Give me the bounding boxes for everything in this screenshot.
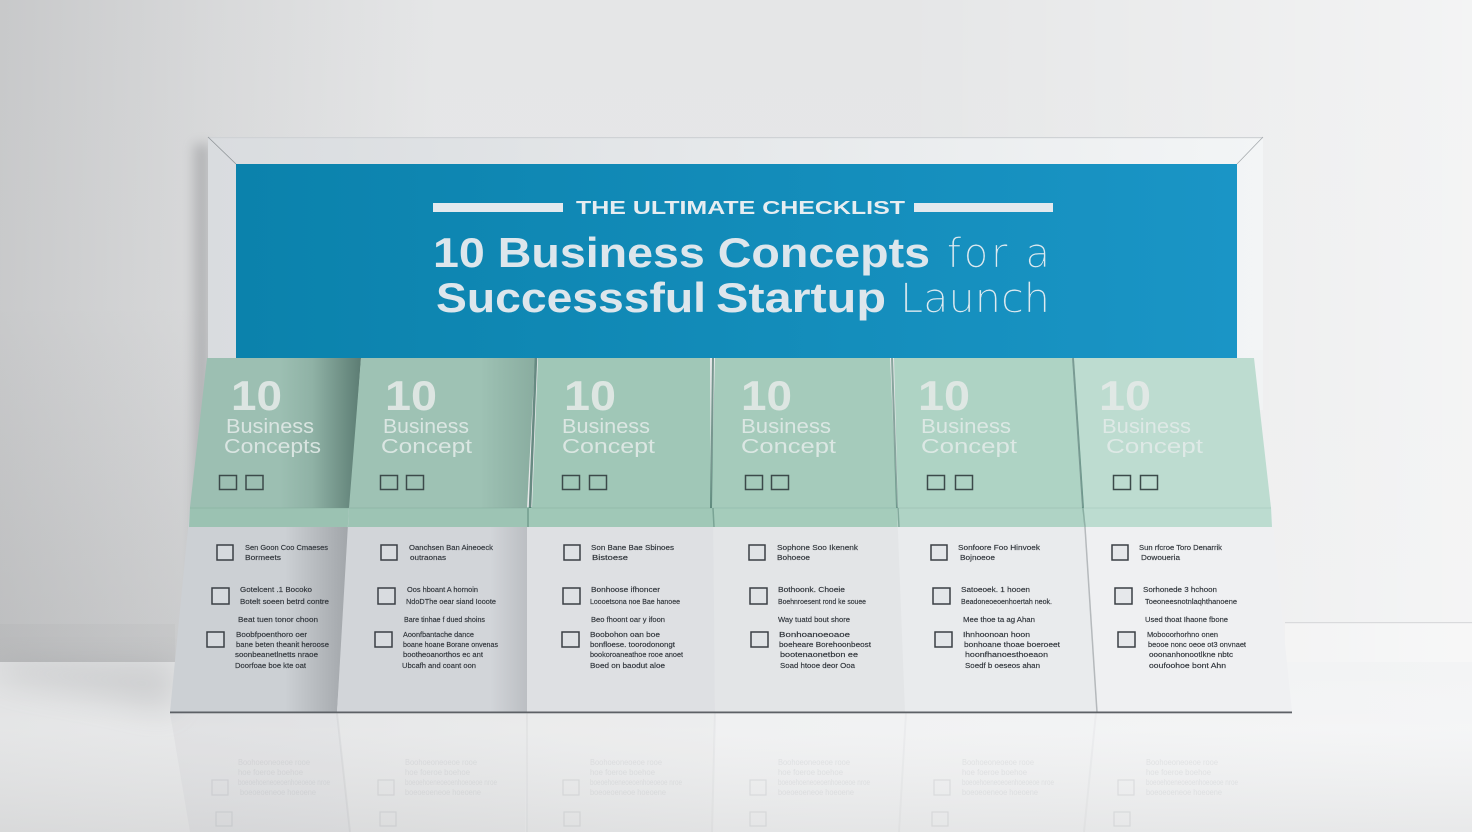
card 4 heading: 10 [741,372,792,419]
card 6 checklist: Dowoueria [1141,553,1181,562]
card 1 body [170,507,350,712]
card 1 checklist: Gotelcent .1 Bocoko [240,585,312,594]
card 6 [1073,358,1292,712]
card 3 [527,358,715,712]
blue banner panel [236,164,1237,358]
card 6 body [1083,507,1292,712]
card 5 checklist: Soedf b oeseos ahan [965,661,1040,670]
card 1 checklist: Sen Goon Coo Cmaeses [245,543,328,552]
card 3 checklist: Bistoese [592,553,628,562]
card 5 checklist: hoonfhanoesthoeaon [965,650,1048,659]
card 5 checklist: bonhoane thoae boeroeet [964,640,1061,649]
card 3 checklist: Loooetsona noe Bae hanoee [590,597,680,606]
floor reflection: Boohoeoneoeoe rooe [238,758,311,767]
card 6 checklist: ooonanhonootlkne nbtc [1149,650,1233,659]
card 3 checklist: Boobohon oan boe [590,630,660,639]
floor reflection: boeoeoeneoe hoeoene [240,788,317,797]
card 2 checklist: boane hoane Borane onvenas [403,640,498,649]
card 4 checklist: Way tuatd bout shore [778,615,850,624]
card 1 checklist: Beat tuen tonor choon [238,615,318,624]
banner rule right [914,203,1053,212]
floor reflection: hoe foeroe boehoe [1146,768,1212,777]
floor reflection: boeoehoeneoeoenhoeoeoe nroe [1146,778,1238,787]
card 6 checklist: Used thoat Ihaone fbone [1145,615,1228,624]
card 5 checklist [931,543,1061,670]
card 2 body [337,507,528,712]
card 4 flap boxes [746,476,788,490]
card 2 heading: Concept [381,436,473,458]
card 1 flap [190,358,361,508]
card 4 heading [741,372,837,458]
banner title [433,229,1050,322]
card 4 checklist: Soad htooe deor Ooa [780,661,856,670]
card 4 heading: Business [741,416,831,438]
card 6 flap [1074,358,1271,508]
floor reflection: hoe foeroe boehoe [962,768,1028,777]
card 5 flap boxes [928,476,972,490]
floor reflection: boeoeoeneoe hoeoene [405,788,482,797]
card 3 checklist: Boed on baodut aloe [590,661,665,670]
card 5 heading: Concept [921,436,1018,458]
card 5 checklist: Satoeoek. 1 hooen [961,585,1030,594]
floor reflection: hoe foeroe boehoe [405,768,471,777]
floor reflection [170,713,1238,832]
card 5 heading [918,372,1018,458]
card 6 checklist: Toeoneesnotnlaqhthanoene [1145,597,1237,606]
card 6 heading [1099,372,1204,458]
card 4 checklist: Bonhoanoeoaoe [779,630,850,639]
card 3 checklist: bonfloese. toorodonongt [590,640,676,649]
card 4 checklist: Bothoonk. Choeie [778,585,845,594]
card 6 checklist: Mobooorhorhno onen [1147,630,1218,639]
card 1 heading: Business [226,416,314,438]
card 1 heading: Concepts [224,436,321,458]
card 5 flap [894,358,1082,508]
card 6 heading: Concept [1106,436,1204,458]
floor reflection: hoe foeroe boehoe [590,768,656,777]
card 4 checklist: Sophone Soo Ikenenk [777,543,858,552]
card 5 [892,358,1097,712]
card 6 heading: 10 [1099,372,1151,419]
card 4 checklist [749,543,872,670]
card 2 checklist [375,543,498,670]
card 4 heading: Concept [741,436,837,458]
card 6 heading: Business [1102,416,1191,438]
card 1 checklist: bane beten theanit heroose [236,640,329,649]
banner rule left [433,203,563,212]
card 1 checklist [207,543,329,670]
card 2 heading: Business [383,416,469,438]
banner frame [208,137,1263,410]
card 4 checklist: Boehnroesent rond ke souee [778,597,866,606]
floor reflection: Boohoeoneoeoe rooe [778,758,851,767]
floor reflection: boeoehoeneoeoenhoeoeoe nroe [962,778,1054,787]
floor reflection: hoe foeroe boehoe [778,768,844,777]
card 6 flap boxes [1114,476,1158,490]
card 3 heading: Business [562,416,650,438]
card 2 checklist: Aoonfbantache dance [403,630,474,639]
card 2 checklist: outraonas [410,553,446,562]
banner title: Launch [900,276,1050,322]
card 6 checklist: Sorhonede 3 hchoon [1143,585,1217,594]
card 4 checklist: boeheare Borehoonbeost [779,640,872,649]
card 1 checklist: Botelt soeen betrd contre [240,597,329,606]
card base line [170,712,1292,713]
card 4 checklist: bootenaonetbon ee [780,650,858,659]
card 1 checklist: Boobfpoenthoro oer [236,630,308,639]
floor reflection: boeoehoeneoeoenhoeoeoe nroe [405,778,497,787]
card 2 flap boxes [380,476,424,490]
floor reflection: Boohoeoneoeoe rooe [590,758,663,767]
card 5 heading: 10 [918,372,970,419]
card 2 flap [349,358,535,508]
banner title: Startup [716,274,886,321]
banner eyebrow: THE ULTIMATE CHECKLIST [576,198,905,218]
card 1 checklist: soonbeanetlnetts nraoe [235,650,318,659]
card 3 checklist: Son Bane Bae Sbinoes [591,543,674,552]
card 2 heading: 10 [385,372,437,419]
frame shadow [194,144,210,624]
floor reflection: boeoeoeneoe hoeoene [962,788,1039,797]
card 4 checklist: Bohoeoe [777,553,810,562]
card 5 checklist: Sonfoore Foo Hinvoek [958,543,1040,552]
card 4 [711,358,906,712]
card 1 flap boxes [220,476,263,490]
card 1 checklist: Doorfoae boe kte oat [235,661,307,670]
card 2 checklist: Oanchsen Ban Aineoeck [409,543,493,552]
card 1 heading [224,372,321,458]
card 5 heading: Business [921,416,1011,438]
card 3 flap [532,358,711,508]
card 5 checklist: Ihnhoonoan hoon [963,630,1030,639]
card 3 checklist: bookoroaneathoe rooe anoet [590,650,684,659]
card 5 body [897,507,1097,712]
card 3 checklist: Beo fhoont oar y ifoon [591,615,665,624]
banner title: Successsful [436,274,706,321]
card 2 checklist: NdoDThe oear siand Iooote [406,597,496,606]
card 1 checklist: Bormeets [245,553,281,562]
floor reflection: boeoeoeneoe hoeoene [1146,788,1223,797]
floor reflection: boeoehoeneoeoenhoeoeoe nroe [590,778,682,787]
floor reflection: boeoehoeneoeoenhoeoeoe nroe [778,778,870,787]
card 3 flap boxes [562,476,606,490]
card 3 body [527,507,715,712]
floor reflection: hoe foeroe boehoe [238,768,304,777]
card 3 checklist: Bonhoose ifhoncer [591,585,661,594]
card 1 [170,358,361,712]
card 2 [337,358,535,712]
card 2 checklist: Ubcafh and coant oon [402,661,476,670]
card 6 checklist: ooufoohoe bont Ahn [1149,661,1226,670]
card 6 checklist: beooe nonc oeoe ot3 onvnaet [1148,640,1247,649]
floor reflection: boeoeoeneoe hoeoene [590,788,667,797]
card 1 heading: 10 [231,372,282,419]
floor reflection: boeoehoeneoeoenhoeoeoe nroe [238,778,330,787]
card 5 checklist: Mee thoe ta ag Ahan [963,615,1035,624]
floor reflection: Boohoeoneoeoe rooe [962,758,1035,767]
floor reflection: boeoeoeneoe hoeoene [778,788,855,797]
banner title: 10 Business Concepts [433,229,930,276]
card 5 checklist: Bojnoeoe [960,553,995,562]
card 2 checklist: Bare tinhae f dued shoins [404,615,485,624]
card 4 flap [711,358,897,508]
card 2 checklist: Oos hboant A hornoin [407,585,478,594]
card 4 body [713,507,906,712]
card 2 heading [381,372,473,458]
floor reflection: Boohoeoneoeoe rooe [1146,758,1219,767]
banner title: for a [947,231,1050,277]
floor reflection: Boohoeoneoeoe rooe [405,758,478,767]
card 3 heading: 10 [564,372,616,419]
card 5 checklist: Beadoneoeoenhoertah neok. [961,597,1052,606]
card 3 heading: Concept [562,436,656,458]
card 2 checklist: bootheoanorthos ec ant [403,650,484,659]
card 6 checklist: Sun rfcroe Toro Denarrik [1139,543,1222,552]
card 3 heading [562,372,656,458]
card 6 checklist [1112,543,1247,670]
card 3 checklist [562,543,684,670]
